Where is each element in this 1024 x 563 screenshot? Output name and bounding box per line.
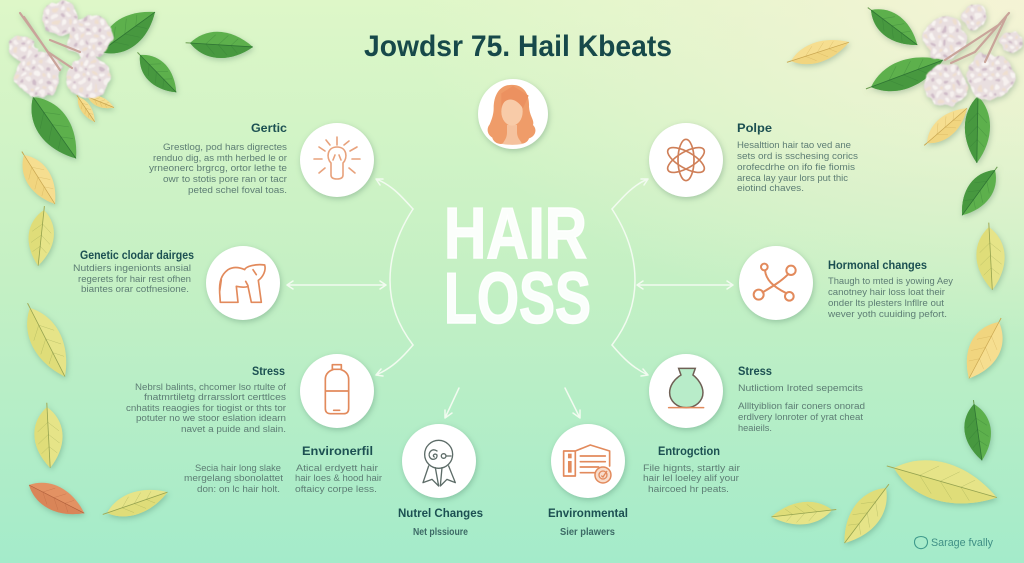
- text block: nutrel changes: [398, 508, 483, 538]
- body: navet a puide and slain.: [181, 424, 286, 434]
- circle: [551, 424, 625, 498]
- central heading: hair loss: HAIR: [444, 194, 587, 274]
- body: [643, 463, 740, 494]
- leaf 7: [24, 474, 90, 524]
- body: hair lel loeley alif your: [643, 473, 739, 483]
- body: eiotind chaves.: [737, 183, 804, 193]
- circle: [300, 354, 374, 428]
- botanical decoration: top left flowers: [8, 0, 164, 168]
- body: [149, 142, 288, 195]
- heading: Entrogction: [658, 446, 720, 458]
- atom rings: [664, 139, 708, 181]
- icon: atom: [649, 123, 723, 197]
- body: owr to stotis pore ran or tacr: [163, 174, 287, 184]
- body: potuter no we stoor eslation idearn: [136, 413, 286, 423]
- icon: certificate: [551, 424, 625, 498]
- body: Atical erdyett hair: [296, 463, 378, 473]
- icon: vase: [649, 354, 723, 428]
- circle: [649, 123, 723, 197]
- logo icon: [915, 536, 928, 549]
- leaf 4: [26, 205, 57, 267]
- body: peted schel foval toas.: [188, 185, 287, 195]
- elephant outline: [220, 265, 265, 302]
- leaf 6: [33, 402, 64, 469]
- icon: bottle: [300, 354, 374, 428]
- leaf: green wide: [861, 47, 948, 102]
- leaf: yellow under flowers: [918, 101, 974, 153]
- body: orofecdrhe on ifo fie fiomis: [737, 162, 856, 172]
- leaf 10: [952, 160, 1007, 222]
- leaf 1: [185, 30, 254, 60]
- body: oftaicy corpe less.: [295, 484, 377, 494]
- left double arrow: [287, 281, 386, 289]
- leaf: green lower: [17, 83, 89, 168]
- leaf: green vertical: [964, 91, 991, 163]
- leaf 13: [961, 398, 995, 462]
- body: File hignts, startly air: [643, 463, 740, 473]
- text block: environerfil: [295, 446, 382, 494]
- connected nodes: [754, 264, 796, 301]
- leaf 16: [770, 499, 837, 528]
- right double arrow: [637, 281, 733, 289]
- body: Hesalttion hair tao ved ane: [737, 140, 851, 150]
- heading: Hormonal changes: [828, 260, 927, 272]
- text block: environmental: [548, 508, 628, 538]
- leaf: green behind flowers: [87, 0, 164, 67]
- logo text: Sarage fvally: [931, 537, 993, 549]
- portrait circle: [478, 79, 548, 149]
- leaf 15: [833, 476, 900, 552]
- text block: polpe: [737, 123, 859, 193]
- leaf 9: [784, 33, 852, 72]
- title: Jowdsr 75. Hail Kbeats: [364, 30, 672, 63]
- text block: hormonal changes: [827, 260, 954, 319]
- circle: [649, 354, 723, 428]
- central heading: hair loss: LOSS: [444, 259, 591, 339]
- flower stems: [20, 13, 80, 70]
- text block: lower left note: don: on lc hair holt.: [197, 484, 280, 494]
- circle: [206, 246, 280, 320]
- leaf 5: [14, 296, 78, 383]
- bottle outline: [325, 365, 349, 414]
- body: areca lay yaur lors put thic: [737, 173, 849, 183]
- arrows: [287, 179, 733, 418]
- arrow to lower left icon: [376, 345, 413, 376]
- body: [737, 140, 859, 193]
- heading: Nutrel Changes: [398, 508, 483, 520]
- portrait icon: [478, 79, 548, 149]
- circle: [739, 246, 813, 320]
- body: onder lts plesters lnfllre out: [828, 298, 945, 308]
- ribbon outline: [423, 440, 455, 486]
- body: hair loes & hood hair: [295, 473, 382, 483]
- flower stems: [945, 13, 1009, 63]
- body: regerets for hair rest ofhen: [78, 274, 191, 284]
- leaf: small wheat gold: [73, 92, 99, 125]
- icon: elephant: [206, 246, 280, 320]
- icon: network: [739, 246, 813, 320]
- flower cluster: [923, 4, 1024, 106]
- body: sets ord is sschesing corics: [737, 151, 859, 161]
- body: Nutlictiom Iroted sepemcits: [738, 383, 864, 393]
- body: [73, 263, 191, 294]
- leaf 11: [975, 222, 1006, 291]
- bulb rays and glass: [314, 137, 360, 179]
- body: renduo dig, as mth herbed le or: [153, 153, 287, 163]
- body: Grestlog, pod hars digrectes: [163, 142, 288, 152]
- body: [126, 382, 287, 434]
- body: canotney hair loss loat their: [828, 287, 945, 297]
- heading: Environmental: [548, 508, 628, 520]
- body: Nebrsl balints, chcomer lso rtulte of: [135, 382, 287, 392]
- body: yrneonerc brgrcg, ortor lethe te: [149, 163, 287, 173]
- arrow to nutrient icon: [445, 388, 459, 418]
- leaf: small wheat gold two: [84, 92, 116, 112]
- caption: Net plssioure: [413, 527, 468, 538]
- arrow to polpe icon: [612, 179, 648, 209]
- leaf 3: [12, 145, 65, 210]
- body: haircoed hr peats.: [648, 484, 729, 494]
- flower cluster: [8, 1, 112, 98]
- body: Nutdiers ingenionts ansial: [73, 263, 191, 273]
- right arc with branches: [612, 209, 635, 345]
- caption: Sier plawers: [560, 527, 615, 538]
- text block: entrogction: [643, 446, 740, 494]
- heading: Polpe: [737, 123, 772, 135]
- text block: stress right: [738, 366, 865, 433]
- text block: lower left note: [184, 463, 284, 494]
- leaf 8: [99, 482, 171, 525]
- central heading: hair loss: [444, 194, 591, 339]
- heading: Gertic: [251, 123, 288, 135]
- botanical decoration: top right flowers: [860, 0, 1024, 163]
- body: fnatmrtiletg drrarsslort certtlces: [144, 392, 287, 402]
- vase outline: [669, 368, 704, 408]
- body: Allltyiblion fair coners onorad: [738, 401, 865, 411]
- body: cnhatits reaogies for tiogist or thts tor: [126, 403, 286, 413]
- text block: gertic: [149, 123, 288, 195]
- body: heaieils.: [738, 423, 772, 433]
- circle: [300, 123, 374, 197]
- icon: light bulb: [300, 123, 374, 197]
- arrow to environmental icon: [565, 388, 580, 418]
- arrow to genetic icon: [376, 179, 413, 209]
- leaf 12: [956, 311, 1014, 386]
- brand logo: [915, 536, 993, 549]
- body: [827, 276, 954, 319]
- text block: stress left: [126, 366, 287, 434]
- text block: lower left note: Secia hair long slake: [195, 463, 281, 473]
- leaf 2: [129, 44, 185, 100]
- body: erdlvery lonroter of yrat cheat: [738, 412, 864, 422]
- body: [738, 383, 865, 433]
- arrow to lower right icon: [612, 345, 648, 376]
- woman with red hair: [488, 85, 535, 145]
- circle: [402, 424, 476, 498]
- heading: Stress: [252, 366, 285, 378]
- text block: lower left note: mergelang sbonolattet: [184, 473, 284, 483]
- body: biantes orar cotfnesione.: [81, 284, 189, 294]
- left arc with branches: [390, 209, 413, 345]
- heading: Environerfil: [302, 446, 373, 458]
- leaf 14: [882, 448, 1002, 516]
- text block: genetic: [73, 250, 194, 294]
- heading: Stress: [738, 366, 772, 378]
- body: [295, 463, 382, 494]
- heading: Genetic clodar dairges: [80, 250, 194, 262]
- document with seal: [564, 445, 611, 483]
- body: wever yoth cuuiding pefort.: [827, 309, 947, 319]
- body: Thaugh to mted is yowing Aey: [828, 276, 954, 286]
- leaf: green upper: [860, 0, 925, 55]
- icon: ribbon award: [402, 424, 476, 498]
